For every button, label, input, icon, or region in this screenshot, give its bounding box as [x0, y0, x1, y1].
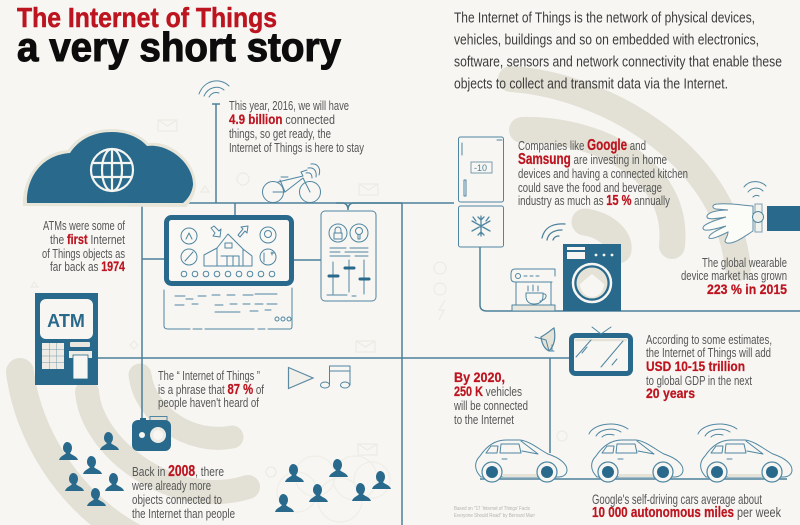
icon: play button — [288, 368, 313, 388]
icon: wrist with smartwatch — [703, 182, 800, 243]
connecting lines — [97, 104, 800, 525]
text: 2008: Back in 2008, there — [132, 463, 224, 480]
text: wearable market — [681, 255, 787, 297]
icon: car three — [698, 424, 792, 482]
text: ATMs: of Things objects as — [42, 246, 125, 261]
icon: washing machine — [542, 224, 621, 311]
icon: laptop — [164, 218, 292, 329]
text: self-driving cars: 10 000 autonomous miles per week — [592, 505, 781, 521]
icon: satellite dish — [535, 328, 555, 351]
text: 4.9 billion: This year, 2016, we will have — [229, 98, 349, 113]
icon: camera — [132, 416, 171, 451]
text: ATMs: ATMs were some of — [43, 218, 125, 233]
title — [17, 2, 341, 70]
icon: fridge — [458, 137, 504, 247]
text: 87 percent: people haven't heard of — [158, 395, 259, 410]
faint decorative icons — [31, 120, 567, 477]
intro text — [454, 10, 782, 92]
text: GDP: USD 10-15 trillion — [646, 358, 745, 374]
text: vehicles: 250 K vehicles — [454, 383, 522, 399]
icon: car one — [476, 440, 567, 482]
text: 4.9 billion: Internet of Things is here to stay — [229, 140, 364, 155]
text: 4.9 billion — [229, 98, 364, 155]
text: 2008: the Internet than people — [132, 506, 235, 521]
text: vehicles — [453, 369, 528, 427]
source note — [454, 506, 535, 519]
text: vehicles: By 2020, — [454, 369, 505, 385]
text: Companies: Companies like Google and — [518, 137, 646, 154]
text: Companies: industry as much as 15 % annually — [518, 192, 670, 209]
text: self-driving cars — [592, 492, 781, 521]
title: a very short story — [17, 24, 341, 70]
icon: car two — [589, 424, 683, 482]
people group right with rings — [275, 456, 391, 522]
text: Companies — [518, 137, 688, 209]
text: GDP — [646, 332, 772, 401]
text: Companies: devices and having a connected kitchen — [518, 166, 688, 181]
text: ATMs: the first Internet — [50, 231, 125, 247]
background wifi arcs right — [511, 79, 738, 268]
icon: ATM: ATM — [47, 311, 85, 331]
text: vehicles: to the Internet — [454, 412, 514, 427]
text: wearable market: 223 % in 2015 — [707, 281, 787, 297]
text: 87 percent: The “ Internet of Things ” — [158, 368, 260, 383]
text: Companies: Samsung are investing in home — [518, 151, 667, 168]
source note: Based on "17 'Internet of Things' Facts — [454, 506, 530, 512]
icon: music notes — [320, 366, 350, 388]
icon: cloud with globe — [23, 129, 196, 207]
icon: tablet — [321, 211, 376, 301]
text: 4.9 billion: things, so get ready, the — [229, 126, 331, 141]
text: 2008: were already more — [131, 478, 211, 493]
text: 2008: objects connected to — [132, 492, 222, 507]
text: GDP: 20 years — [646, 385, 695, 401]
text: GDP: to global GDP in the next — [646, 373, 752, 388]
icon: coffee machine — [511, 269, 555, 311]
intro text: objects to collect and transmit data via the Internet. — [454, 76, 728, 92]
text: Companies: could save the food and beverage — [518, 180, 662, 195]
text: 87 percent: is a phrase that 87 % of — [158, 381, 264, 398]
title: The Internet of Things — [17, 2, 277, 33]
people group left — [59, 432, 124, 506]
keyboard — [164, 288, 292, 329]
icon: fridge: -10 — [474, 163, 487, 173]
text: ATMs: far back as 1974 — [50, 258, 125, 274]
house and smart icons — [181, 226, 276, 277]
icon: ATM — [35, 293, 98, 385]
icon: connected bicycle — [262, 164, 320, 202]
text: 2008 — [131, 463, 235, 521]
text: vehicles: will be connected — [453, 398, 528, 413]
background wifi arcs left — [20, 372, 248, 525]
source note: Everyone Should Read" by Bernard Marr — [454, 513, 535, 519]
text: 87 percent — [158, 368, 264, 410]
text: 4.9 billion: 4.9 billion connected — [229, 111, 335, 127]
icon: television — [572, 327, 630, 374]
laptop screen — [166, 218, 292, 284]
icon: antenna wifi — [199, 81, 229, 97]
text: ATMs — [42, 218, 125, 274]
